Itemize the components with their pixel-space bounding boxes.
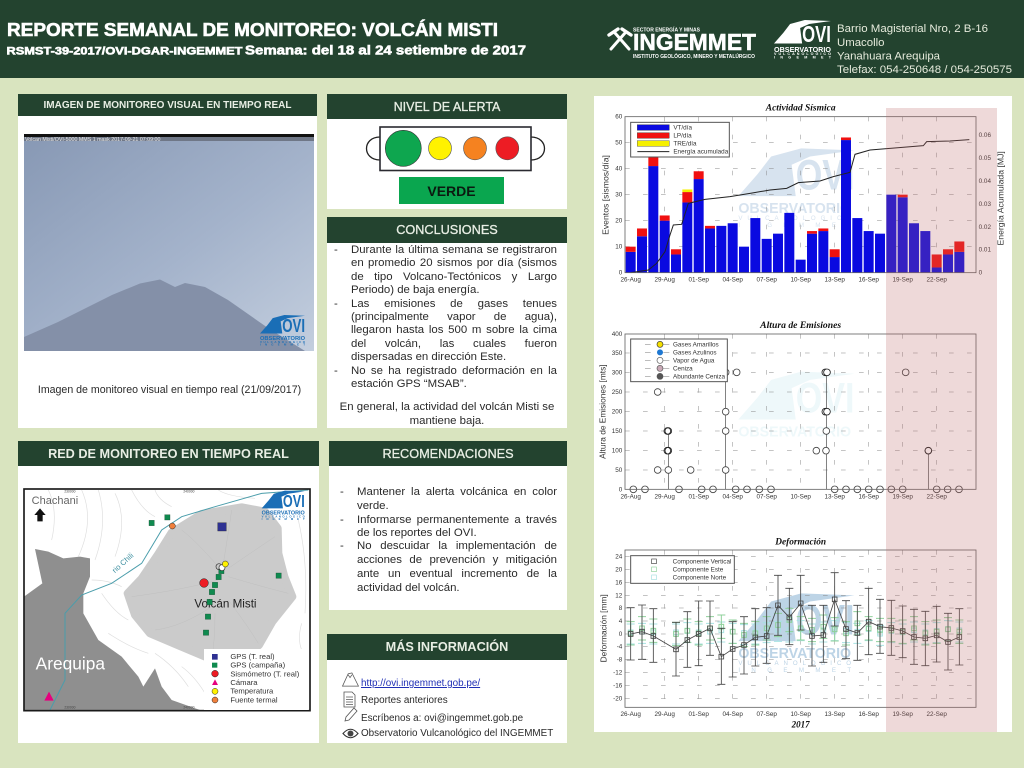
- watermark: OBSERVATORIO: [738, 200, 851, 217]
- date ticks: 01-Sep: [688, 711, 709, 718]
- left ticks: 150: [612, 428, 623, 435]
- date ticks: 04-Sep: [722, 711, 743, 718]
- date ticks: 10-Sep: [790, 711, 811, 718]
- watermark: OVI: [796, 375, 854, 422]
- right ticks: 0.05: [979, 155, 991, 162]
- volcano area: [128, 507, 292, 660]
- map legend: Sismómetro (T. real): [230, 669, 300, 678]
- conclusions text: No se ha registrado deformación en la: [351, 365, 557, 377]
- date ticks: 13-Sep: [824, 494, 845, 501]
- coordinates: 230000: [64, 489, 76, 493]
- right ticks: 0.04: [979, 178, 991, 185]
- coordinates: 240000: [183, 706, 195, 710]
- legend: deformation: Componente Vertical: [673, 558, 731, 565]
- left ticks: 20: [615, 218, 623, 225]
- date ticks: 29-Aug: [654, 711, 675, 718]
- recommendations text: [340, 486, 557, 594]
- conclusions text: Las emisiones de gases tenues: [351, 298, 557, 310]
- email: Escríbenos a: ovi@ingemmet.gob.pe: [361, 713, 523, 724]
- date ticks: 22-Sep: [926, 711, 947, 718]
- conclusions text: dispersadas en dirección Este.: [351, 351, 506, 363]
- map frame: [24, 489, 310, 711]
- recommendations text: verde.: [357, 500, 389, 512]
- heading: alert level: [327, 94, 567, 119]
- conclusions text: en promedio 20 sismos por día (sismos: [351, 257, 557, 269]
- alert label: VERDE: [427, 182, 476, 198]
- left ticks: 16: [615, 579, 623, 586]
- legend: emissions: Ceniza: [673, 365, 693, 372]
- watermark: [738, 148, 854, 229]
- logo: OVI: OBSERVATORIO: [774, 45, 831, 54]
- place labels: Volcán Misti: [194, 597, 257, 610]
- left ticks: 4: [619, 618, 623, 625]
- panel: conclusions: [327, 217, 567, 428]
- conclusions text: En general, la actividad del volcán Misti se: [340, 401, 554, 413]
- north component: [627, 621, 963, 645]
- date ticks: [620, 494, 947, 501]
- conclusions text: -: [334, 365, 338, 377]
- recommendations text: -: [340, 514, 344, 526]
- logo: OVI on photo: OVI: [282, 316, 305, 336]
- chart title: seismic: Actividad Sísmica: [765, 104, 836, 114]
- map legend: Temperatura: [230, 687, 274, 696]
- observatory: Observatorio Vulcanológico del INGEMMET: [361, 728, 553, 739]
- logo: INGEMMET: INSTITUTO GEOLÓGICO, MINERO Y METALÚRGICO: [633, 52, 755, 60]
- logo: OVI: INGEMMET: [774, 56, 832, 60]
- logo: OVI: OVI: [802, 21, 831, 47]
- left ticks: [612, 331, 623, 493]
- date ticks: 16-Sep: [858, 494, 879, 501]
- legend: emissions: Gases Amarillos: [673, 341, 719, 348]
- legend: seismic: [631, 122, 729, 157]
- date ticks: 04-Sep: [722, 494, 743, 501]
- right ticks: 0.01: [979, 247, 991, 254]
- coordinates: 230000: [64, 706, 76, 710]
- axis labels: Eventos [sismos/día]: [601, 155, 611, 235]
- energy line: [631, 140, 969, 273]
- place labels: rio Chili: [110, 551, 136, 575]
- watermark: INGEMMET: [738, 667, 851, 674]
- legend: deformation: [631, 556, 734, 583]
- legend: deformation: Componente Este: [673, 566, 724, 573]
- date ticks: 26-Aug: [620, 494, 641, 501]
- date ticks: 10-Sep: [790, 277, 811, 284]
- map legend: GPS (campaña): [230, 661, 286, 670]
- axes: [625, 550, 976, 707]
- date ticks: 01-Sep: [688, 277, 709, 284]
- emission stems: [668, 372, 928, 489]
- icon: pencil: [344, 708, 358, 722]
- recommendations text: actividad del volcán.: [357, 582, 460, 594]
- icon: volcano outline: [342, 672, 359, 686]
- legend: emissions: [631, 339, 727, 382]
- logo: OVI on map: OVI: [283, 491, 305, 511]
- logo: OVI on map: INGEMMET: [262, 517, 305, 521]
- logo: OVI: VULCANOLOGICO: [774, 52, 831, 56]
- left ticks: 250: [612, 389, 623, 396]
- heading: conclusions: CONCLUSIONES: [396, 223, 498, 237]
- left ticks: -20: [613, 696, 623, 703]
- chart: deformation: [598, 538, 976, 729]
- heading: visual monitoring: IMAGEN DE MONITOREO VISUAL EN TIEMPO REAL: [44, 100, 291, 110]
- heading: visual monitoring: [18, 94, 317, 116]
- left ticks: 24: [615, 554, 623, 561]
- conclusions text: estación GPS “MSAB”.: [351, 378, 467, 390]
- left ticks: 50: [615, 140, 623, 147]
- logo: OVI on map: [262, 491, 306, 521]
- date ticks: [620, 277, 947, 284]
- conclusions text: [334, 244, 557, 427]
- right ticks: 0.03: [979, 201, 991, 208]
- panel: monitoring network: [18, 441, 319, 743]
- chart title: emissions: Altura de Emisiones: [759, 320, 841, 331]
- date ticks: 29-Aug: [654, 277, 675, 284]
- date ticks: 04-Sep: [722, 277, 743, 284]
- left ticks: 0: [619, 270, 623, 277]
- highlight: current week band: [886, 108, 997, 732]
- left ticks: 12: [615, 592, 623, 599]
- map legend: Cámara: [230, 678, 258, 687]
- header text and logos: [6, 19, 1012, 76]
- conclusions text: Periodo) de baja energía.: [351, 284, 480, 296]
- alert label: [399, 177, 504, 204]
- map legend: [204, 649, 309, 710]
- logo: INGEMMET: INGEMMET: [633, 29, 756, 55]
- left ticks: 0: [619, 631, 623, 638]
- heading: monitoring network: RED DE MONITOREO EN TIEMPO REAL: [48, 446, 289, 460]
- heading: recommendations: [329, 441, 567, 466]
- recommendations text: -: [340, 540, 344, 552]
- logo: OVI on photo: VULCANOLOGICO: [260, 340, 306, 344]
- conclusions text: del volcán, las cuales fueron: [351, 338, 557, 350]
- left ticks: 60: [615, 114, 623, 121]
- header band: [0, 0, 1024, 78]
- volcano photo: [24, 134, 314, 351]
- legend: seismic: LP/día: [673, 132, 692, 139]
- icon: document: [344, 692, 356, 708]
- map contours: [48, 490, 308, 693]
- logo: OVI on photo: INGEMMET: [260, 342, 305, 346]
- date ticks: 19-Sep: [892, 277, 913, 284]
- place labels: [32, 495, 257, 673]
- map legend: GPS (T. real): [230, 652, 275, 661]
- heading: more information: [327, 634, 567, 660]
- legend: emissions: Gases Azulinos: [673, 349, 717, 356]
- place labels: Arequipa: [36, 653, 105, 673]
- link: http://ovi.ingemmet.gob.pe/: [361, 678, 480, 689]
- panel: recommendations: [329, 441, 567, 610]
- conclusions text: de tipo Volcano-Tectónicos y Largo: [351, 271, 557, 283]
- stacked bars: [626, 137, 964, 273]
- left ticks: 20: [615, 566, 623, 573]
- legend: seismic: Energía acumulada: [673, 149, 729, 156]
- axis label: Altura de Emisiones [mts]: [597, 364, 607, 459]
- heading: more information: MÁS INFORMACIÓN: [386, 640, 508, 654]
- conclusions text: (principalmente vapor de agua),: [351, 311, 557, 323]
- date ticks: 16-Sep: [858, 277, 879, 284]
- right ticks: 0.06: [979, 132, 991, 139]
- watermark: VULCANOLOGICO: [738, 215, 851, 222]
- axis labels: Energía Acumulada [MJ]: [995, 151, 1005, 245]
- right ticks: 0: [979, 270, 983, 277]
- logo: OVI on map: OBSERVATORIO: [262, 511, 305, 517]
- left ticks: -12: [613, 670, 623, 677]
- chart: emission height: [597, 320, 976, 501]
- left ticks: 300: [612, 369, 623, 376]
- left ticks: 10: [615, 244, 623, 251]
- recommendations text: Mantener la alerta volcánica en color: [357, 486, 557, 498]
- date ticks: 13-Sep: [824, 277, 845, 284]
- conclusions text: llegaron hasta los 500 m sobre la cima: [351, 324, 557, 336]
- watermark: INGEMMET: [738, 222, 851, 229]
- heading: monitoring network: [18, 441, 319, 466]
- watermark: [738, 593, 854, 674]
- watermark: OBSERVATORIO: [738, 424, 851, 441]
- panel: visual monitoring image: [18, 94, 317, 428]
- map legend: Fuente termal: [230, 695, 278, 704]
- address: Yanahuara Arequipa: [837, 50, 941, 62]
- logo: OVI on map: VULCANOLOGICO: [262, 514, 306, 518]
- chart: seismic activity: [601, 104, 1005, 284]
- legend: emissions: Vapor de Agua: [673, 357, 715, 364]
- panel: more information: [327, 634, 567, 743]
- place labels: Chachani: [32, 495, 78, 507]
- date ticks: [620, 711, 947, 718]
- axes: [625, 117, 976, 273]
- right ticks: 0.02: [979, 224, 991, 231]
- date ticks: 07-Sep: [756, 711, 777, 718]
- conclusions text: Durante la última semana se registraron: [351, 244, 557, 256]
- legend: seismic: VT/día: [673, 124, 692, 131]
- legend: deformation: Componente Norte: [673, 574, 727, 581]
- river: [50, 490, 308, 710]
- logo: OVI: [774, 20, 832, 60]
- heading: conclusions: [327, 217, 567, 243]
- date ticks: 22-Sep: [926, 277, 947, 284]
- left ticks: 30: [615, 192, 623, 199]
- legend: seismic: TRE/día: [673, 140, 697, 147]
- watermark: OVI: [796, 151, 854, 198]
- panel: alert level: [327, 94, 567, 209]
- heading: recommendations: RECOMENDACIONES: [382, 446, 514, 460]
- recommendations text: Informarse permanentemente a través: [357, 514, 557, 526]
- left ticks: -8: [617, 657, 623, 664]
- title: REPORTE SEMANAL DE MONITOREO: VOLCÁN MISTI: [7, 19, 498, 40]
- conclusions text: -: [334, 298, 338, 310]
- recommendations text: ante un eventual incremento de la: [357, 568, 557, 580]
- city of Arequipa area: [24, 549, 202, 711]
- east component: [627, 608, 963, 647]
- date ticks: 22-Sep: [926, 494, 947, 501]
- watermark: VULCANOLOGICO: [738, 660, 851, 667]
- date ticks: 16-Sep: [858, 711, 879, 718]
- logo: INGEMMET: SECTOR ENERGÍA Y MINAS: [633, 26, 700, 34]
- axis label: Deformación [mm]: [598, 594, 608, 662]
- left ticks: [613, 554, 623, 703]
- left ticks: 50: [615, 467, 623, 474]
- left ticks: 40: [615, 166, 623, 173]
- address: Telefax: 054-250648 / 054-250575: [837, 64, 1012, 76]
- icon: eye: [342, 728, 359, 738]
- logo: OVI on photo: [260, 315, 306, 346]
- stations: [44, 515, 281, 701]
- watermark: OVI: [796, 596, 854, 643]
- left ticks: 0: [619, 486, 623, 493]
- date ticks: 01-Sep: [688, 494, 709, 501]
- date ticks: 19-Sep: [892, 494, 913, 501]
- coordinates: [64, 489, 195, 710]
- left ticks: 100: [612, 448, 623, 455]
- conclusions text: mantiene baja.: [410, 415, 484, 427]
- left ticks: 200: [612, 409, 623, 416]
- watermark: OBSERVATORIO: [738, 645, 851, 662]
- right ticks: [979, 132, 991, 277]
- recommendations text: acciones de prevención y mitigación: [357, 554, 557, 566]
- logo: OVI on photo: OBSERVATORIO: [260, 336, 306, 342]
- recommendations text: No descuidar la implementación de: [357, 540, 557, 552]
- year label: 2017: [791, 719, 810, 729]
- heading: alert level: NIVEL DE ALERTA: [394, 100, 500, 114]
- date ticks: 07-Sep: [756, 494, 777, 501]
- icon: north arrow: [34, 508, 46, 521]
- conclusions text: -: [334, 244, 338, 256]
- recommendations text: de los reportes del OVI.: [357, 527, 477, 539]
- date ticks: 10-Sep: [790, 494, 811, 501]
- address: Umacollo: [837, 37, 884, 49]
- date ticks: 29-Aug: [654, 494, 675, 501]
- previous reports: Reportes anteriores: [361, 695, 448, 706]
- left ticks: 8: [619, 605, 623, 612]
- traffic light: [366, 126, 546, 172]
- icon: crossed hammers: [609, 29, 631, 49]
- panel: charts: [594, 96, 1012, 732]
- week: Semana: del 18 al 24 setiembre de 2017: [245, 42, 526, 58]
- map: [23, 488, 311, 712]
- left ticks: 400: [612, 331, 623, 338]
- axes: [625, 334, 976, 489]
- vertical component: [627, 573, 963, 684]
- left ticks: [615, 114, 623, 277]
- volcano photo: Volcan Misti/OVI-5000 MMS 1 mask 2017-09-21 07:09:00: [25, 137, 160, 143]
- axis labels: [601, 151, 1005, 245]
- recommendations text: -: [340, 486, 344, 498]
- emission points: [630, 369, 962, 493]
- legend: emissions: Abundante Ceniza: [673, 373, 726, 380]
- left ticks: 350: [612, 350, 623, 357]
- watermark: [738, 372, 854, 441]
- photo caption: Imagen de monitoreo visual en tiempo real (21/09/2017): [38, 384, 301, 396]
- chart title: deformation: Deformación: [774, 538, 826, 548]
- date ticks: 26-Aug: [620, 277, 641, 284]
- address: Barrio Magisterial Nro, 2 B-16: [837, 23, 988, 35]
- date ticks: 19-Sep: [892, 711, 913, 718]
- report code: RSMST-39-2017/OVI-DGAR-INGEMMET: [6, 46, 243, 58]
- date ticks: 07-Sep: [756, 277, 777, 284]
- address: [837, 23, 1012, 76]
- left ticks: -4: [617, 644, 623, 651]
- left ticks: -16: [613, 683, 623, 690]
- date ticks: 13-Sep: [824, 711, 845, 718]
- date ticks: 26-Aug: [620, 711, 641, 718]
- coordinates: 240000: [183, 489, 195, 493]
